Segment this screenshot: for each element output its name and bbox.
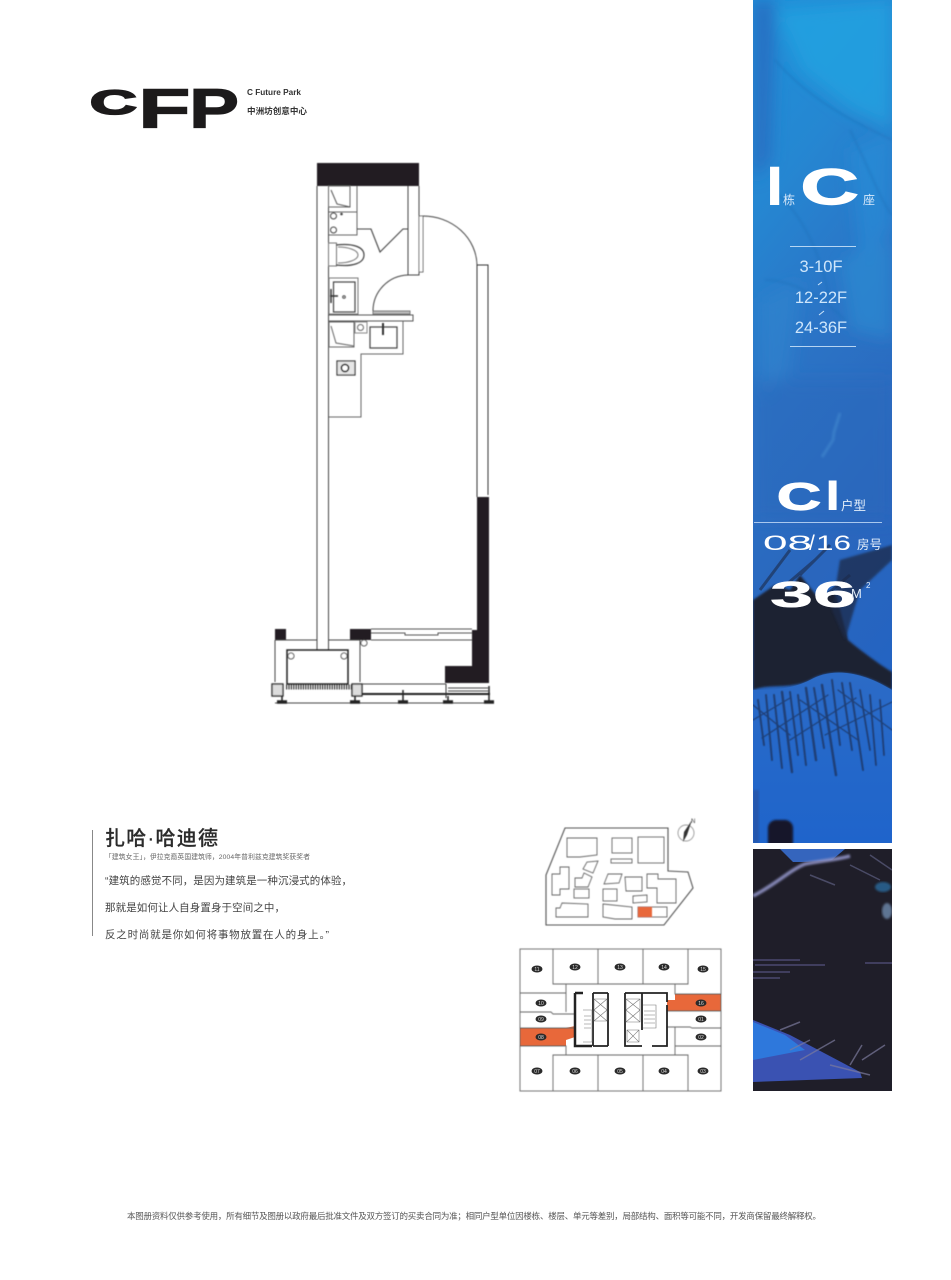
unit numbers: 03 (700, 1069, 706, 1075)
unit numbers: 01 (698, 1017, 704, 1023)
room numbers: 08/16: 16 (816, 531, 851, 555)
basin (329, 278, 358, 314)
area: 36 M2: M (851, 586, 862, 601)
logo: CFP C Future Park: C Future Park (247, 88, 302, 97)
quote text: 反之时尚就是你如何将事物放置在人的身上。” (105, 928, 330, 941)
toilet (328, 243, 364, 266)
quote subtitle: 「建筑女王」，伊拉克裔英国建筑师，2004年普利兹克建筑奖获奖者 (105, 852, 310, 861)
unit type: C1: I (821, 472, 844, 520)
unit numbers: 06 (572, 1069, 578, 1075)
unit numbers: 12 (572, 965, 578, 971)
unit numbers: 14 (661, 965, 667, 971)
partition and door (328, 315, 413, 321)
unit numbers: 13 (617, 965, 623, 971)
panel: blue sidebar (753, 0, 892, 850)
building label: 1 C (761, 154, 875, 217)
unit numbers: 10 (538, 1001, 544, 1007)
quote text (105, 874, 352, 941)
black structural wall (445, 497, 489, 683)
quote heading: 扎哈·哈迪德 (105, 827, 218, 850)
logo: CFP C Future Park: C (90, 83, 137, 121)
unit numbers: 11 (534, 967, 540, 973)
icon: compass: N (691, 819, 695, 825)
logo: CFP C Future Park: P (189, 76, 239, 139)
quote block: Zaha Hadid (92, 827, 352, 941)
building label: 1 C: I (761, 154, 788, 217)
key floor plan (520, 949, 721, 1091)
highlighted units (520, 994, 721, 1046)
site map (546, 819, 695, 925)
logo: CFP C Future Park (90, 76, 307, 140)
unit numbers: 09 (538, 1017, 544, 1023)
unit type: C1: C (777, 475, 821, 518)
building label: 1 C: 栋 (783, 192, 795, 207)
building label: 1 C: 座 (863, 192, 875, 207)
unit numbers: 04 (661, 1069, 667, 1075)
unit numbers: 05 (617, 1069, 623, 1075)
decorative blue fan (753, 673, 892, 850)
floor ranges (790, 246, 856, 346)
washer (329, 186, 357, 235)
balcony and window (272, 629, 494, 703)
room numbers: 08/16 (763, 531, 882, 555)
unit lines (520, 949, 721, 1091)
unit type: C1 (777, 472, 866, 520)
elevator core (575, 993, 667, 1046)
quote text: “建筑的感觉不同，是因为建筑是一种沉浸式的体验， (105, 874, 352, 887)
unit numbers: 02 (698, 1035, 704, 1041)
decorative light patches (753, 0, 892, 370)
unit numbers: 08 (538, 1035, 544, 1041)
decorative dark ink (753, 575, 892, 690)
logo: CFP C Future Park: F (138, 78, 190, 140)
kitchen (329, 321, 403, 417)
room numbers: 08/16: 房号 (857, 537, 882, 552)
icon: compass (678, 819, 695, 842)
unit numbers: 15 (700, 967, 706, 973)
room numbers: 08/16: 08 (763, 532, 812, 555)
floor ranges: 24-36F (795, 319, 847, 337)
disclaimer: 本图册资料仅供参考使用，所有细节及图册以政府最后批准文件及双方签订的买卖合同为准；相同户型单位因楼栋、楼层、单元等差别，局部结构、面积等可能不同，开发商保留最终解释权。 (127, 1211, 821, 1221)
logo: CFP C Future Park: 中洲坊创意中心 (247, 106, 307, 116)
unit numbers (532, 964, 708, 1075)
unit numbers: 07 (534, 1069, 540, 1075)
area: 36 M2: 36 (770, 574, 856, 615)
floor plan: C1 unit (272, 163, 494, 703)
quote text: 那就是如何让人自身置身于空间之中， (105, 901, 285, 914)
bathroom door wall (357, 229, 408, 252)
building label: 1 C: C (801, 160, 859, 215)
room numbers: 08/16: / (809, 532, 815, 555)
unit type: C1: 户型 (841, 498, 866, 513)
area: 36 M2: 2 (866, 581, 871, 590)
unit numbers: 16 (698, 1001, 704, 1007)
highlighted building (638, 907, 652, 917)
floor ranges: 3-10F (799, 258, 843, 276)
panel: dark lower sidebar (753, 849, 892, 1091)
floor ranges: 12-22F (795, 289, 847, 307)
shower (328, 186, 350, 207)
